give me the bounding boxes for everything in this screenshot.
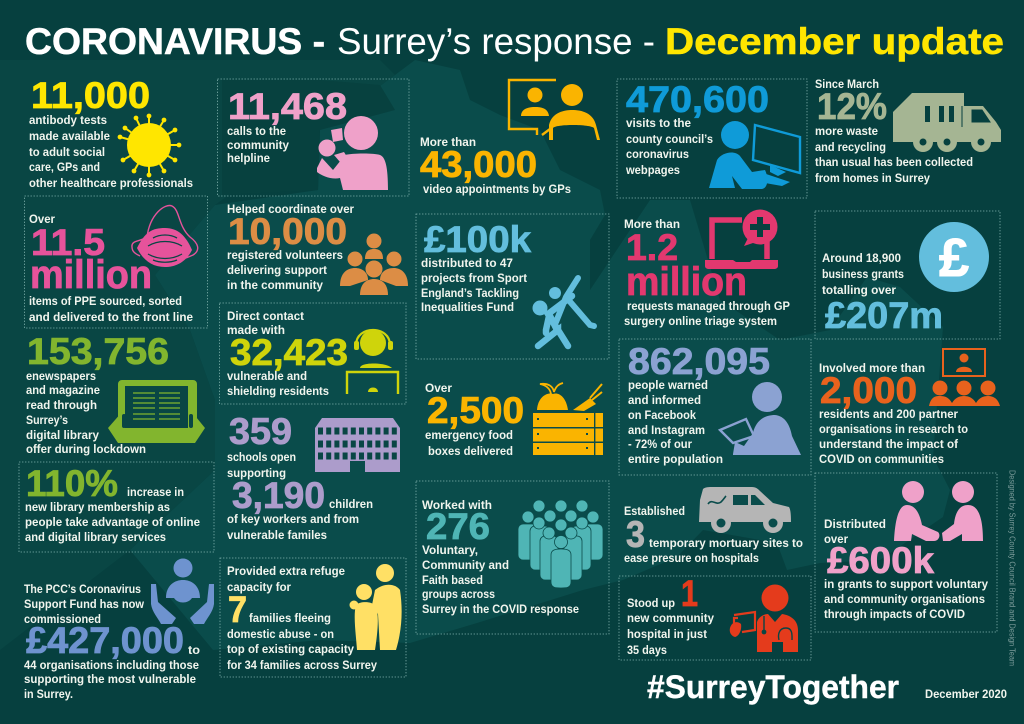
panel: grants to voluntary organisations: through impacts of COVID: [824, 608, 965, 621]
panel: PCC support fund: The PCC’s Coronavirus: [24, 583, 141, 596]
panel: Sport England fund: England’s Tackling: [421, 287, 519, 300]
panel: business grants: [815, 211, 1000, 339]
panel: waste and recycling: Since March: [815, 78, 879, 91]
panel: food boxes: [425, 382, 603, 458]
panel: website visits: [617, 79, 807, 198]
panel: GP triage requests: surgery online triage system: [624, 315, 777, 328]
panel: mortuary sites: ease presure on hospitals: [624, 552, 759, 565]
panel: antibody tests: care, GPs and: [29, 161, 100, 174]
panel: business grants: Around 18,900: [822, 252, 901, 265]
panel: waste and recycling: from homes in Surrey: [815, 172, 931, 185]
panel: library membership: increase in: [127, 486, 184, 499]
panel: Sport England fund: Inequalities Fund: [421, 301, 514, 314]
panel: community hospital: Stood up: [627, 597, 675, 610]
panel: library membership: [19, 462, 214, 552]
panel: voluntary groups: groups across: [422, 588, 495, 601]
icon: hands holding tablet: [108, 380, 205, 443]
panel: digital library: Surrey’s: [26, 414, 68, 427]
panel: research involvement: understand the impact of: [819, 438, 958, 451]
panel: schools: 359: [229, 411, 292, 452]
panel: social media reach: - 72% of our: [628, 438, 692, 451]
panel: waste and recycling: [815, 78, 1001, 185]
panel: voluntary groups: Community and: [422, 559, 509, 572]
icon: refuse lorry: [893, 93, 1001, 152]
panel: volunteers: [227, 203, 408, 295]
panel: video appointments: [420, 80, 600, 196]
panel: schools: vulnerable familes: [227, 529, 327, 542]
panel: website visits: county council’s: [626, 133, 713, 146]
panel: waste and recycling: and recycling: [815, 141, 886, 154]
credit: Designed by Surrey County Council Brand and Design Team: [1008, 470, 1018, 666]
panel: community hospital: 35 days: [627, 644, 667, 657]
panel: grants to voluntary organisations: [815, 473, 997, 632]
panel: volunteers: in the community: [227, 279, 324, 292]
panel: antibody tests: [29, 75, 193, 190]
panel: volunteers: delivering support: [227, 264, 327, 277]
panel: shielding residents contact: made with: [227, 324, 285, 337]
panel: digital library: and magazine: [26, 384, 101, 397]
panel: schools: [227, 411, 400, 542]
panel: social media reach: 862,095: [628, 341, 770, 382]
panel: community helpline: calls to the: [227, 125, 287, 138]
panel: PPE: million: [30, 253, 152, 297]
panel: schools: supporting: [227, 467, 286, 480]
panel: business grants: totalling over: [822, 284, 896, 297]
icon: group of people: [340, 234, 408, 295]
icon: crate of vegetables: [533, 383, 603, 456]
panel: Sport England fund: [416, 214, 609, 359]
panel: library membership: 110%: [26, 463, 118, 504]
panel: GP triage requests: [624, 210, 790, 328]
icon: school building: [315, 418, 400, 472]
panel: grants to voluntary organisations: over: [824, 533, 848, 546]
panel: grants to voluntary organisations: in grants to support voluntary: [824, 578, 989, 591]
panel: digital library: enewspapers: [26, 370, 96, 383]
panel: digital library: offer during lockdown: [26, 443, 146, 456]
panel: food boxes: Over: [425, 382, 452, 395]
icon: call handler with headset: [347, 330, 398, 394]
title: December update: [665, 21, 1004, 62]
panel: voluntary groups: Worked with: [422, 499, 492, 512]
panel: business grants: business grants: [822, 268, 904, 281]
panel: refuge capacity: top of existing capacity: [227, 643, 355, 656]
panel: website visits: webpages: [625, 164, 680, 177]
panel: library membership: new library membership as: [25, 501, 170, 514]
icon: virus: [119, 115, 180, 176]
panel: volunteers: registered volunteers: [227, 249, 343, 262]
panel: community helpline: helpline: [227, 152, 271, 165]
panel: community hospital: hospital in just: [627, 628, 707, 641]
panel: PPE: Over: [29, 213, 55, 226]
panel: digital library: digital library: [26, 429, 100, 442]
panel: PCC support fund: to: [188, 644, 200, 657]
panel: schools: children: [329, 498, 373, 511]
panel: refuge capacity: domestic abuse - on: [227, 628, 334, 641]
panel: library membership: people take advantage of online: [25, 516, 201, 529]
panel: refuge capacity: 7: [228, 589, 247, 630]
icon: crowd of people: [518, 500, 603, 588]
panel: antibody tests: antibody tests: [29, 114, 107, 127]
panel: PCC support fund: supporting the most vulnerable: [24, 673, 197, 686]
icon: person with tablet: [720, 382, 801, 455]
panel: research involvement: Involved more than: [819, 362, 925, 375]
panel: shielding residents contact: 32,423: [230, 332, 348, 373]
panel: community helpline: community: [227, 139, 290, 152]
panel: social media reach: on Facebook: [628, 409, 697, 422]
icon: mother and child: [350, 564, 402, 650]
panel: refuge capacity: capacity for: [227, 581, 291, 594]
panel: community hospital: new community: [627, 612, 715, 625]
title: Surrey’s response -: [337, 21, 655, 62]
panel: voluntary groups: [416, 481, 609, 634]
panel: research involvement: residents and 200 partner: [819, 408, 958, 421]
icon: exercising figures: [532, 278, 594, 346]
panel: grants to voluntary organisations: and community organisations: [824, 593, 985, 606]
panel: website visits: visits to the: [626, 117, 692, 130]
panel: social media reach: [619, 339, 811, 475]
panel: website visits: 470,600: [626, 79, 769, 120]
panel: digital library: read through: [26, 399, 97, 412]
panel: PPE: and delivered to the front line: [29, 311, 194, 324]
panel: PCC support fund: Support Fund has now: [24, 598, 145, 611]
panel: PCC support fund: [24, 558, 214, 701]
panel: antibody tests: to adult social: [29, 146, 105, 159]
panel: PCC support fund: commissioned: [24, 613, 101, 626]
title: [25, 21, 1004, 62]
panel: mortuary sites: [624, 487, 803, 565]
panel: antibody tests: other healthcare professionals: [29, 177, 193, 190]
panel: antibody tests: made available: [29, 130, 111, 143]
date: December 2020: [925, 688, 1007, 701]
panel: video appointments: 43,000: [420, 144, 537, 185]
panel: PPE: items of PPE sourced, sorted: [29, 295, 182, 308]
panel: research involvement: COVID on communities: [819, 453, 944, 466]
panel: research involvement: [819, 349, 1000, 466]
panel: shielding residents contact: shielding residents: [227, 385, 329, 398]
icon: person at computer: [709, 121, 800, 189]
panel: refuge capacity: for 34 families across Surrey: [227, 659, 378, 672]
panel: shielding residents contact: Direct contact: [227, 310, 304, 323]
panel: GP triage requests: requests managed through GP: [627, 300, 790, 313]
panel: business grants: £207m: [825, 295, 943, 336]
panel: voluntary groups: Faith based: [422, 574, 483, 587]
panel: voluntary groups: Voluntary,: [422, 544, 478, 557]
hashtag: #SurreyTogether: [647, 669, 899, 705]
icon: GP video call: [509, 80, 600, 140]
title: CORONAVIRUS -: [25, 21, 325, 62]
panel: PPE: [24, 196, 208, 328]
panel: research involvement: organisations in research to: [819, 423, 968, 436]
panel: library membership: and digital library services: [25, 531, 166, 544]
panel: website visits: coronavirus: [626, 148, 689, 161]
panel: research involvement: 2,000: [820, 370, 917, 411]
icon: doctor: [730, 584, 798, 652]
panel: social media reach: people warned: [628, 379, 708, 392]
panel: GP triage requests: 1.2: [626, 227, 678, 268]
panel: digital library: [26, 331, 205, 456]
panel: community helpline: 11,468: [228, 86, 347, 127]
panel: PCC support fund: 44 organisations including those: [24, 659, 200, 672]
panel: community helpline: [218, 79, 409, 196]
panel: voluntary groups: 276: [426, 506, 490, 547]
icon: pound coin: [919, 222, 989, 292]
panel: video appointments: video appointments by GPs: [423, 183, 571, 196]
panel: community hospital: [619, 573, 811, 660]
panel: Sport England fund: projects from Sport: [421, 272, 527, 285]
panel: schools: of key workers and from: [227, 513, 359, 526]
icon: hands supporting person: [151, 558, 214, 624]
panel: community hospital: 1: [681, 573, 698, 614]
icon: face mask: [132, 206, 198, 267]
panel: PCC support fund: in Surrey.: [24, 688, 73, 701]
panel: shielding residents contact: vulnerable and: [227, 370, 307, 383]
panel: mortuary sites: 3: [626, 514, 645, 555]
panel: refuge capacity: families fleeing: [249, 612, 331, 625]
panel: grants to voluntary organisations: £600k: [827, 540, 934, 581]
panel: mortuary sites: temporary mortuary sites to: [649, 537, 803, 550]
panel: grants to voluntary organisations: Distributed: [824, 518, 886, 531]
panel: mortuary sites: Established: [624, 505, 685, 518]
panel: Sport England fund: £100k: [424, 219, 531, 260]
panel: Sport England fund: distributed to 47: [421, 257, 513, 270]
panel: GP triage requests: More than: [624, 218, 680, 231]
panel: refuge capacity: [220, 558, 406, 677]
icon: handshake: [894, 481, 983, 541]
panel: volunteers: 10,000: [228, 211, 347, 252]
panel: volunteers: Helped coordinate over: [227, 203, 354, 216]
panel: waste and recycling: than usual has been collected: [815, 156, 973, 169]
panel: social media reach: entire population: [628, 453, 723, 466]
panel: waste and recycling: 12%: [817, 86, 887, 127]
panel: video appointments: More than: [420, 136, 476, 149]
icon: private ambulance van: [699, 487, 791, 533]
panel: food boxes: 2,500: [427, 390, 524, 431]
panel: GP triage requests: million: [626, 260, 747, 304]
panel: PCC support fund: £427,000: [26, 620, 184, 661]
panel: voluntary groups: Surrey in the COVID response: [422, 603, 580, 616]
icon: audience watching screen: [929, 349, 1000, 406]
panel: schools: 3,190: [232, 475, 325, 516]
panel: food boxes: boxes delivered: [428, 445, 513, 458]
panel: digital library: 153,756: [27, 331, 169, 372]
icon: laptop with medical speech bubble: [705, 210, 778, 269]
panel: waste and recycling: more waste: [815, 125, 879, 138]
panel: PPE: 11.5: [31, 222, 105, 263]
panel: food boxes: emergency food: [425, 429, 513, 442]
panel: social media reach: and Instagram: [628, 424, 705, 437]
panel: shielding residents contact: [220, 303, 406, 404]
panel: antibody tests: 11,000: [31, 75, 150, 116]
panel: schools: schools open: [227, 451, 296, 464]
icon: pound coin: £: [939, 228, 969, 288]
panel: social media reach: and informed: [628, 394, 701, 407]
icon: person on telephone: [317, 116, 388, 190]
panel: refuge capacity: Provided extra refuge: [227, 565, 346, 578]
